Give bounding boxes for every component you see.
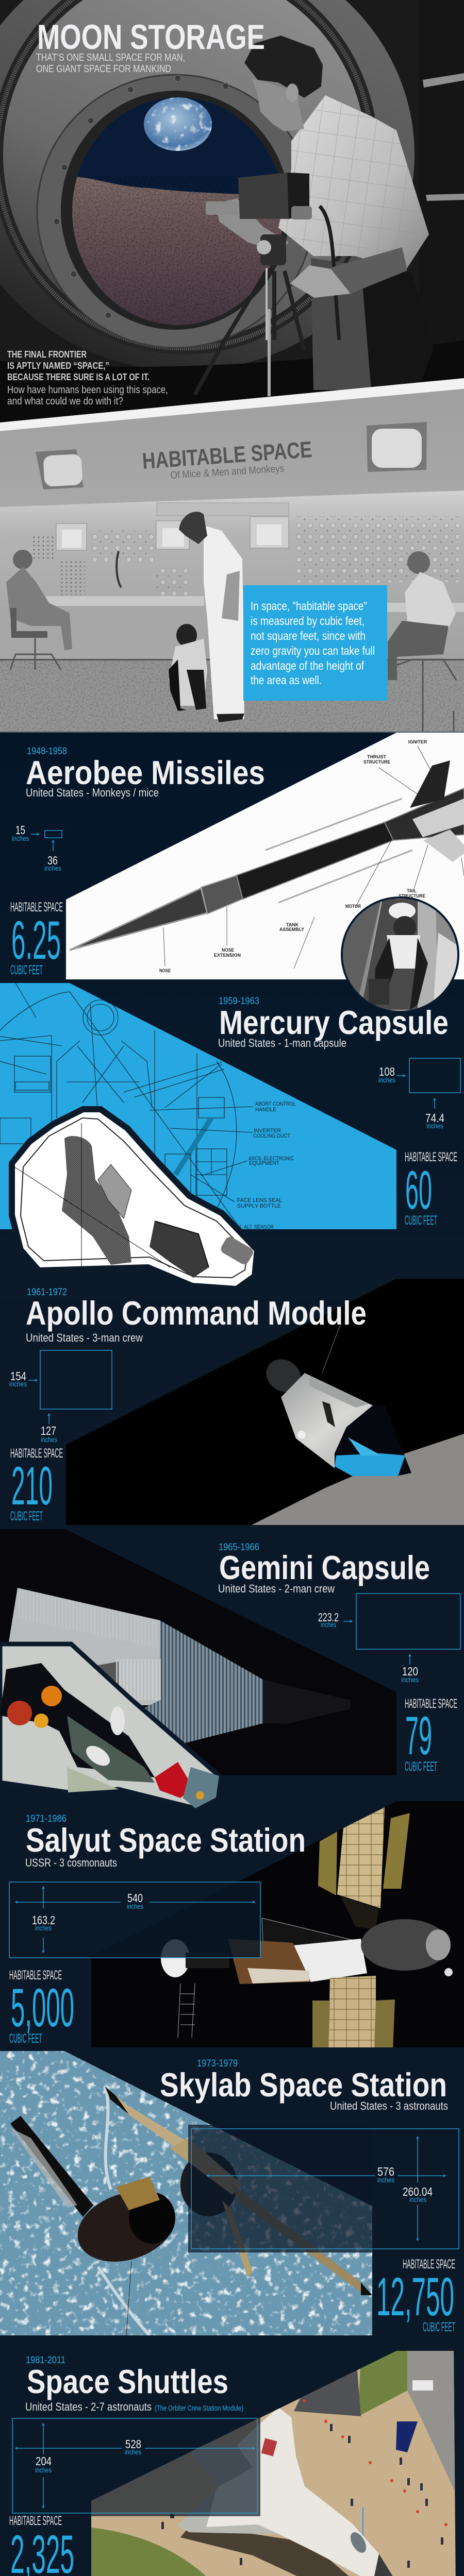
icon: right monitor	[367, 422, 427, 472]
stat: habitable space	[9, 1968, 74, 2046]
stat: habitable space	[10, 1446, 63, 1523]
dimension box: inches	[35, 1924, 52, 1932]
overlay and dimension box	[12, 2418, 260, 2516]
heading: Space Shuttles	[27, 2363, 228, 2400]
rocket diagram: STRUCTURE	[399, 893, 425, 899]
rocket diagram: STRUCTURE	[363, 759, 390, 765]
dimension diagram: 223.2	[318, 1611, 339, 1624]
callout: cubic feet: zero gravity you can take full	[251, 644, 375, 657]
stat: habitable space	[9, 2514, 74, 2576]
dimension box: inches	[127, 1902, 143, 1910]
year: 1959-1963	[219, 996, 259, 1007]
blueprint background: INVERTER	[254, 1128, 281, 1134]
white ceiling strip	[0, 378, 464, 431]
year: 1971-1986	[26, 1814, 67, 1824]
year: 1948-1958	[27, 746, 67, 757]
dimension diagram: inches	[41, 1435, 57, 1444]
blueprint background: HANDLE	[255, 1107, 276, 1113]
rocket diagram	[66, 733, 464, 979]
heading: Aerobee Missiles	[26, 754, 265, 791]
intro text: How have humans been using this space,	[7, 384, 168, 396]
dimension diagram: 108	[379, 1065, 395, 1078]
rocket diagram: TANK	[286, 922, 299, 927]
icon: earth	[142, 97, 214, 151]
stat: habitable space: HABITABLE SPACE	[9, 1968, 62, 1982]
intro text: THE FINAL FRONTIER	[7, 349, 87, 360]
dimension diagram: 154	[10, 1369, 26, 1383]
callout: cubic feet: is measured by cubic feet,	[251, 614, 364, 628]
heading: habitable space: HABITABLE SPACE	[141, 437, 313, 474]
subheading: USSR - 3 cosmonauts	[25, 1856, 117, 1869]
stat: habitable space: CUBIC FEET	[9, 2031, 42, 2046]
dimension diagram: 120	[402, 1665, 418, 1678]
dimension box	[9, 1882, 260, 1958]
dimension diagram: inches	[12, 834, 29, 842]
rocket diagram: NOSE	[222, 947, 234, 953]
year: 1973-1979	[197, 2058, 238, 2069]
panel: aerobee missiles	[10, 733, 464, 979]
overlay and dimension box	[188, 2125, 459, 2252]
rocket diagram: MOTOR	[345, 904, 361, 909]
standing man in white	[179, 512, 244, 722]
subheading: United States - 1-man capsule	[218, 1037, 346, 1049]
mercury capsule cutaway	[10, 1109, 257, 1289]
seated man left	[6, 550, 72, 670]
dimension diagram	[9, 1350, 112, 1444]
stat: habitable space	[10, 900, 63, 977]
overlay and dimension box: 204	[36, 2454, 52, 2468]
rocket diagram: IGNITER	[408, 739, 427, 744]
subheading: United States - Monkeys / mice	[26, 786, 159, 799]
dimension diagram: inches	[9, 1380, 27, 1388]
dimension diagram	[12, 823, 62, 872]
blueprint background: EQUIPMENT	[249, 1160, 279, 1166]
blueprint background: FACE LENS SEAL	[237, 1197, 282, 1204]
panel: aerobee missiles: HABITABLE SPACE	[10, 900, 63, 914]
stat: habitable space: HABITABLE SPACE	[9, 2514, 62, 2528]
panel: habitable space control room	[0, 378, 464, 733]
floor	[0, 659, 464, 733]
panel: apollo command module: HABITABLE SPACE	[10, 1446, 63, 1461]
subheading: (The Orbiter Crew Station Module)	[155, 2404, 243, 2413]
subheading	[25, 2400, 243, 2413]
overlay and dimension box: 528	[125, 2437, 141, 2451]
panel: skylab space station	[0, 2051, 459, 2335]
blueprint background: SUPPLY BOTTLE	[237, 1203, 281, 1209]
dimension diagram: 36	[47, 854, 58, 867]
dimension diagram	[318, 1594, 460, 1684]
rocket diagram: TAIL	[407, 888, 417, 893]
callout: cubic feet: not square feet, since with	[251, 629, 366, 642]
photo: shuttle on tarmac	[91, 2351, 456, 2576]
rocket diagram: THRUST	[367, 754, 387, 759]
overlay and dimension box: inches	[377, 2176, 394, 2184]
dimension box: 540	[127, 1891, 143, 1905]
dimension diagram	[378, 1058, 460, 1130]
callout: cubic feet: advantage of the height of	[251, 659, 364, 672]
stat: habitable space: 79	[405, 1706, 432, 1766]
dimension diagram: 127	[41, 1424, 56, 1437]
blueprint background: ABORT CONTROL	[255, 1101, 296, 1107]
subheading: Of Mice & Men and Monkeys	[170, 463, 285, 481]
overlay and dimension box: inches	[125, 2448, 141, 2456]
year: 1981-2011	[26, 2355, 65, 2366]
dimension diagram: inches	[321, 1620, 336, 1629]
intro text: IS APTLY NAMED “SPACE,”	[7, 360, 109, 371]
stat: habitable space: CUBIC FEET	[10, 1509, 43, 1523]
subtitle: ONE GIANT SPACE FOR MANKIND	[36, 63, 171, 75]
photo: skylab over earth	[0, 2051, 372, 2335]
control console	[0, 490, 464, 659]
overlay and dimension box: inches	[409, 2195, 426, 2204]
heading: Apollo Command Module	[26, 1294, 367, 1332]
intro text: BECAUSE THERE SURE IS A LOT OF IT.	[7, 371, 150, 382]
panel: salyut space station	[9, 1801, 464, 2050]
dimension diagram: inches	[401, 1675, 419, 1684]
hatch door photograph	[0, 0, 464, 453]
wall band	[0, 389, 464, 508]
year: 1961-1972	[27, 1287, 67, 1298]
subheading: United States - 2-7 astronauts	[25, 2400, 152, 2413]
stat: habitable space: 210	[11, 1456, 53, 1516]
blueprint background: ASCS. ELECTRONIC	[248, 1156, 294, 1162]
dimension diagram: inches	[44, 864, 61, 872]
man with camera on tripod	[195, 36, 433, 396]
callout: cubic feet	[243, 585, 387, 701]
panel: hero photo	[0, 0, 464, 453]
blueprint background	[0, 983, 396, 1231]
dimension diagram: inches	[426, 1122, 443, 1130]
intro text: and what could we do with it?	[7, 396, 123, 407]
stat: habitable space	[405, 1150, 457, 1228]
subtitle	[36, 52, 185, 75]
subheading: United States - 2-man crew	[218, 1582, 335, 1595]
overlay and dimension box: 260.04	[403, 2185, 433, 2198]
blueprint background: MAX. ALT. SENSOR	[231, 1224, 274, 1230]
seated man right	[388, 551, 456, 732]
blueprint background: COOLING DUCT	[253, 1133, 290, 1139]
subtitle: THAT’S ONE SMALL SPACE FOR MAN,	[36, 52, 185, 63]
overlay and dimension box: 576	[377, 2165, 394, 2178]
panel: apollo command module	[9, 1279, 464, 1525]
panel: salyut space station: 5,000	[11, 1978, 74, 2038]
callout: cubic feet: the area as well.	[251, 673, 322, 687]
title: MOON STORAGE	[37, 18, 265, 57]
stat: habitable space: 60	[405, 1160, 432, 1221]
stat: habitable space: CUBIC FEET	[10, 963, 43, 977]
overlay and dimension box: inches	[35, 2466, 52, 2474]
chimpanzee	[169, 624, 207, 711]
panel: mercury capsule	[0, 896, 461, 1289]
icon: left monitor	[36, 449, 84, 489]
photo: gemini spacecraft	[0, 1529, 396, 1775]
heading: Salyut Space Station	[26, 1821, 306, 1859]
year: 1965-1966	[219, 1542, 259, 1553]
panel: space shuttles	[9, 2351, 456, 2576]
subheading: United States - 3-man crew	[26, 1331, 143, 1344]
dimension diagram: inches	[378, 1076, 395, 1084]
section background: navy	[0, 733, 464, 1299]
photo: ham the chimp	[340, 896, 461, 1015]
panel: gemini capsule	[0, 1529, 460, 1808]
callout: cubic feet: In space, "habitable space"	[251, 599, 367, 613]
intro text	[7, 349, 168, 407]
panel: aerobee missiles: 6.25	[11, 910, 61, 971]
photo: command module over the moon	[66, 1279, 464, 1525]
rocket diagram: ASSEMBLY	[279, 927, 304, 932]
dimension diagram: 15	[15, 823, 25, 837]
photo: salyut	[91, 1801, 464, 2050]
rocket diagram: EXTENSION	[214, 953, 241, 958]
dimension diagram: 74.4	[425, 1111, 444, 1125]
window view: earth over the lunar horizon	[72, 97, 282, 325]
rocket diagram: NOSE	[159, 968, 171, 973]
dimension box: 163.2	[32, 1913, 55, 1927]
gemini cutaway illustration	[0, 1644, 219, 1808]
